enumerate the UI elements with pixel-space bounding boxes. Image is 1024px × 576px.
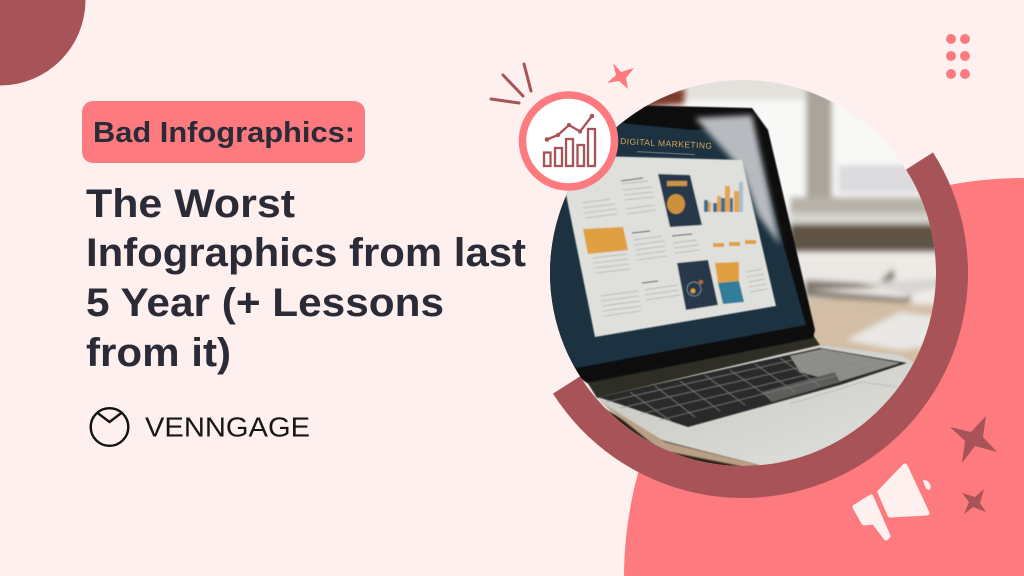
title: Infographics from last — [86, 231, 526, 275]
keyboard — [598, 348, 907, 427]
bar chart — [704, 182, 743, 212]
screen glare — [695, 115, 780, 245]
star near chart badge — [607, 63, 634, 89]
Venngage logo — [91, 408, 310, 446]
small dark star — [962, 489, 986, 514]
navy card — [658, 174, 702, 227]
icon: megaphone — [855, 466, 930, 538]
chart badge — [522, 95, 614, 187]
window and desk background — [684, 80, 936, 364]
orange callout — [583, 227, 628, 254]
laptop deck — [598, 344, 914, 465]
laptop lid bezel — [540, 105, 815, 383]
on-screen document — [558, 155, 776, 337]
icon: line and bar chart — [544, 116, 595, 166]
laptop screen — [540, 122, 806, 368]
title: 5 Year (+ Lessons — [86, 281, 444, 325]
Venngage logo: VENNGAGE — [145, 412, 310, 442]
decorative dot grid — [946, 34, 970, 79]
laptop hinge — [587, 335, 820, 398]
large pink blob — [624, 178, 1024, 576]
icon: logo circle — [91, 408, 128, 446]
screen heading — [620, 138, 712, 156]
tag: Bad Infographics: Bad Infographics: — [93, 117, 355, 149]
screen heading: DIGITAL MARKETING — [620, 136, 712, 151]
orange and teal card — [715, 262, 739, 283]
dark card bottom — [677, 260, 718, 310]
large dark star — [950, 416, 997, 463]
top brown blur behind lid — [640, 88, 685, 108]
tag: Bad Infographics — [82, 101, 365, 163]
rays — [491, 64, 531, 103]
title: The Worst — [86, 182, 295, 226]
small orange labels — [713, 243, 724, 247]
title — [86, 182, 526, 375]
photo: laptop on desk — [550, 80, 936, 466]
decorative corner circle — [0, 0, 86, 86]
title: from it) — [86, 331, 231, 375]
maroon arc ring — [553, 152, 968, 498]
text placeholder lines — [582, 181, 767, 316]
